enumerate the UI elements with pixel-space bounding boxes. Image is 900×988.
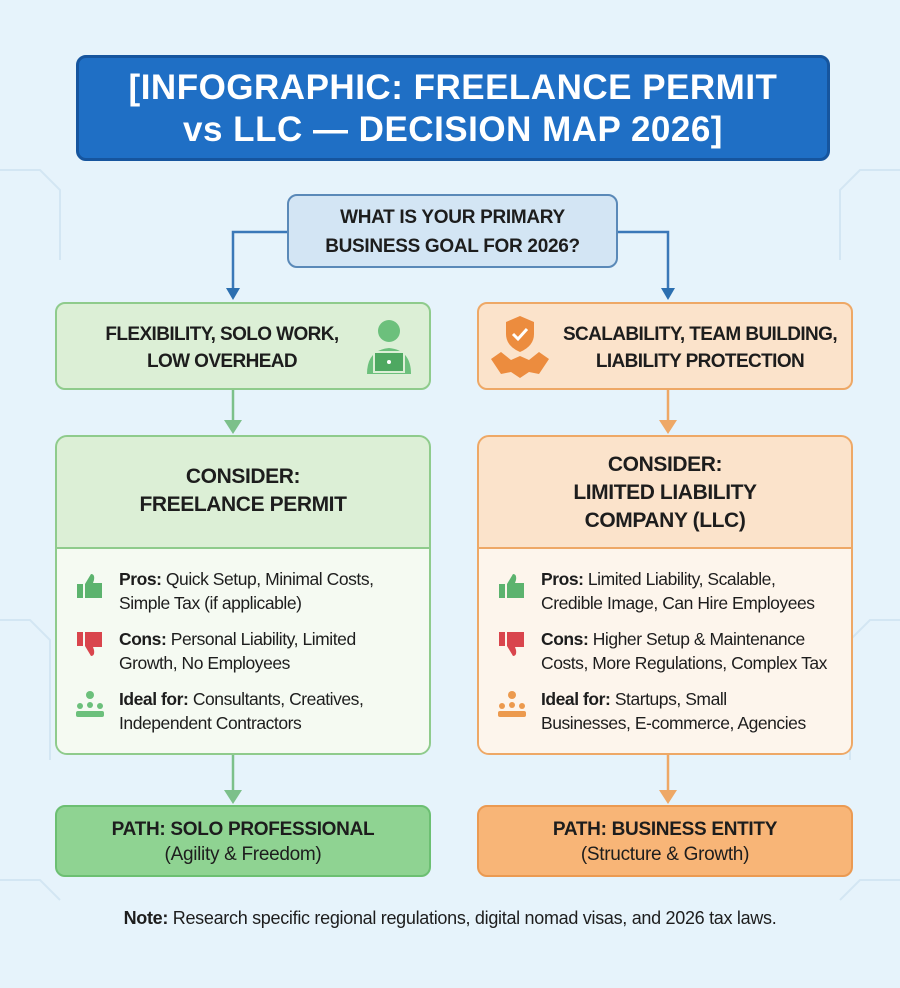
title: vs LLC — DECISION MAP 2026]	[183, 110, 723, 149]
ideal for: Businesses, E-commerce, Agencies	[541, 713, 806, 733]
goal: scalability: LIABILITY PROTECTION	[596, 351, 804, 372]
cons: Cons: Personal Liability, Limited	[119, 629, 356, 649]
path: solo professional: PATH: SOLO PROFESSIONAL	[112, 819, 374, 840]
goal: scalability	[477, 302, 853, 390]
ideal for: Independent Contractors	[119, 713, 301, 733]
question box: WHAT IS YOUR PRIMARY	[340, 207, 565, 228]
icon: people	[76, 691, 104, 717]
icon: thumbs down	[77, 632, 102, 656]
card: freelance permit: CONSIDER:	[186, 465, 300, 488]
cons: Cons: Higher Setup & Maintenance	[541, 629, 805, 649]
note: Note: Research specific regional regulations, digital nomad visas, and 2026 tax laws.	[124, 908, 776, 928]
icon: people	[498, 691, 526, 717]
card: LLC	[477, 435, 853, 755]
path: solo professional: (Agility & Freedom)	[165, 844, 321, 865]
icon: thumbs down	[499, 632, 524, 656]
path: solo professional	[55, 805, 431, 877]
ideal for	[541, 689, 806, 733]
title: [INFOGRAPHIC: FREELANCE PERMIT	[129, 68, 777, 107]
pros	[119, 569, 374, 613]
icon: thumbs up	[77, 574, 102, 598]
icon: person with laptop	[367, 320, 411, 374]
ideal for: Ideal for: Consultants, Creatives,	[119, 689, 363, 709]
ideal for: Ideal for: Startups, Small	[541, 689, 727, 709]
pros: Simple Tax (if applicable)	[119, 593, 302, 613]
icon: shield handshake	[491, 316, 549, 378]
pros: Credible Image, Can Hire Employees	[541, 593, 815, 613]
card: LLC: COMPANY (LLC)	[585, 509, 745, 532]
cons	[119, 629, 356, 673]
pros: Pros: Limited Liability, Scalable,	[541, 569, 775, 589]
question box	[287, 194, 618, 268]
title	[76, 55, 830, 161]
goal: flexibility: LOW OVERHEAD	[147, 351, 297, 372]
question box: BUSINESS GOAL FOR 2026?	[325, 236, 580, 257]
ideal for	[119, 689, 363, 733]
card: LLC: LIMITED LIABILITY	[573, 481, 757, 504]
path: business entity	[477, 805, 853, 877]
goal: flexibility	[55, 302, 431, 390]
card: LLC: CONSIDER:	[608, 453, 722, 476]
cons	[541, 629, 828, 673]
icon: thumbs up	[499, 574, 524, 598]
card: freelance permit	[55, 435, 431, 755]
path: business entity: (Structure & Growth)	[581, 844, 749, 865]
cons: Costs, More Regulations, Complex Tax	[541, 653, 827, 673]
pros: Pros: Quick Setup, Minimal Costs,	[119, 569, 374, 589]
goal: scalability: SCALABILITY, TEAM BUILDING,	[563, 324, 837, 345]
pros	[541, 569, 815, 613]
card: freelance permit: FREELANCE PERMIT	[139, 493, 347, 516]
cons: Growth, No Employees	[119, 653, 290, 673]
path: business entity: PATH: BUSINESS ENTITY	[553, 819, 777, 840]
goal: flexibility: FLEXIBILITY, SOLO WORK,	[105, 324, 339, 345]
